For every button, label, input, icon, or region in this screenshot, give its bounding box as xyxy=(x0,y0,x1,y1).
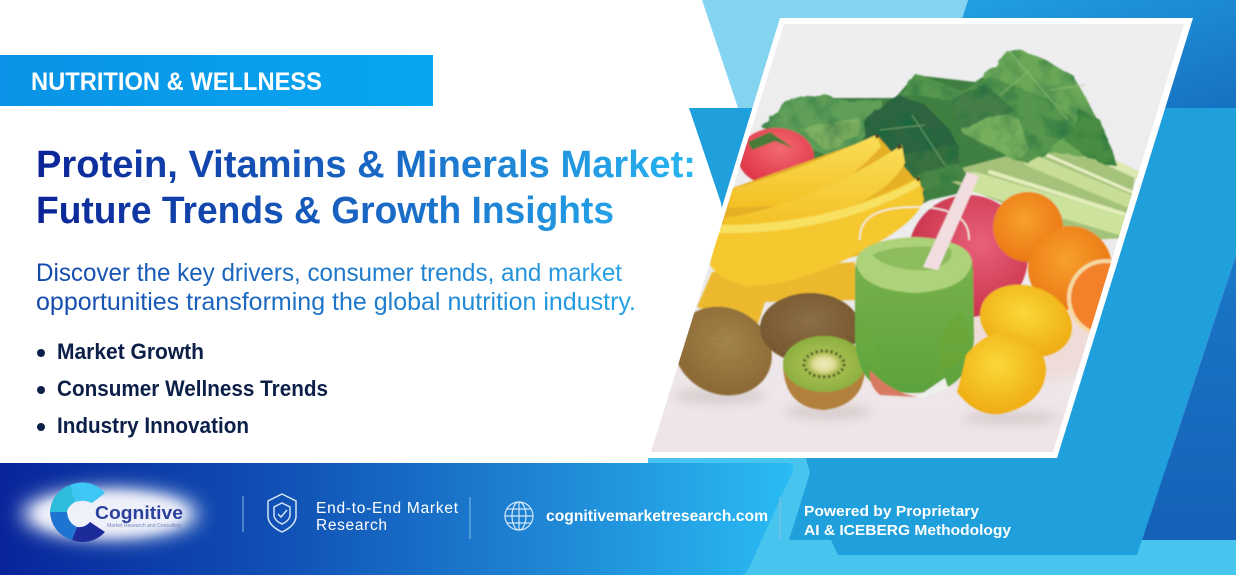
oranges xyxy=(993,192,1063,262)
lower banana xyxy=(697,262,855,327)
logo: Cognitive xyxy=(95,502,183,523)
banana base xyxy=(722,136,925,259)
methodology text xyxy=(804,503,1012,539)
title: Protein, Vitamins & Minerals Market: xyxy=(36,144,696,186)
methodology text: AI & ICEBERG Methodology xyxy=(804,522,1012,539)
leaf base mass xyxy=(812,75,1007,204)
logo xyxy=(22,482,198,542)
category banner xyxy=(0,55,433,106)
website: cognitivemarketresearch.com xyxy=(546,508,768,525)
subtitle: opportunities transforming the global nutrition industry. xyxy=(36,288,636,316)
tomato xyxy=(738,128,814,186)
bullet list: Industry Innovation xyxy=(57,413,249,438)
dividers xyxy=(243,496,780,539)
bullet list xyxy=(37,339,328,438)
lemons xyxy=(978,284,1073,358)
straw xyxy=(923,172,979,270)
smoothie glass xyxy=(860,207,969,240)
large light leaf xyxy=(982,48,1097,157)
floor shadows xyxy=(674,388,1058,425)
leaf masses xyxy=(760,48,1118,183)
food image xyxy=(645,20,1190,456)
apple xyxy=(908,195,1028,317)
icon: globe xyxy=(505,502,533,530)
orange slice xyxy=(1066,258,1112,334)
subtitle: Discover the key drivers, consumer trends, and market xyxy=(36,259,622,287)
celery stalks xyxy=(951,152,1136,240)
text: end-to-end: Research xyxy=(316,517,387,534)
text: end-to-end xyxy=(316,500,459,534)
photo frame xyxy=(645,18,1193,458)
title xyxy=(36,144,696,232)
kiwi fruits xyxy=(678,292,856,396)
spinach xyxy=(899,72,1085,165)
text: end-to-end: End-to-End Market xyxy=(316,500,459,517)
logo: Market Research and Consulting xyxy=(107,523,181,529)
methodology text: Powered by Proprietary xyxy=(804,503,980,520)
leaf veins xyxy=(880,52,1085,165)
bullet list: Market Growth xyxy=(57,339,204,364)
bananas xyxy=(729,135,881,208)
title: Future Trends & Growth Insights xyxy=(36,190,614,232)
light left leaf xyxy=(760,93,882,155)
bullet list: Consumer Wellness Trends xyxy=(57,376,328,401)
photo: fruit and vegetables xyxy=(645,18,1193,458)
category banner: NUTRITION & WELLNESS xyxy=(31,68,322,96)
footer band xyxy=(0,463,793,575)
subtitle xyxy=(36,259,636,316)
icon: shield xyxy=(268,494,296,532)
